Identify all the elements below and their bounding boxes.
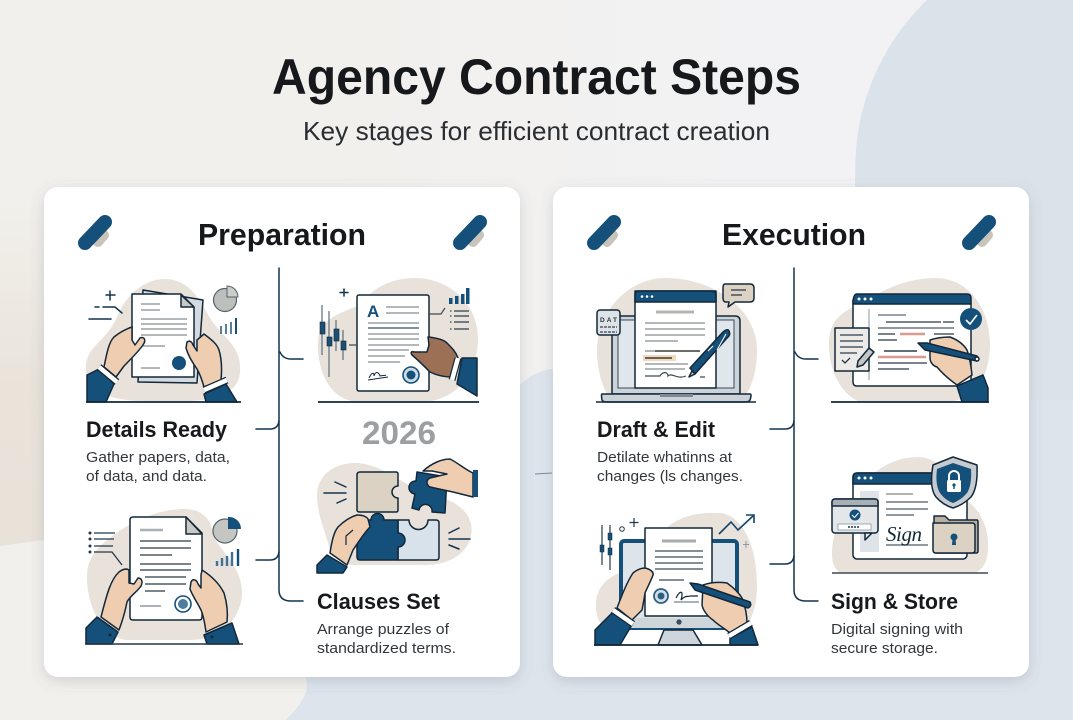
panel: execution [553,187,1029,677]
step: details ready: Gather papers, data, [86,449,230,466]
illustration: clauses puzzle [317,459,478,573]
illustration: sign and secure store: Sign [886,522,922,546]
panel: preparation [44,187,520,677]
icon: pill left [85,222,105,243]
illustration: contract review: A [367,302,379,321]
step: sign and store: secure storage. [831,640,938,657]
connector lines [770,268,818,601]
illustration: sign and secure store [832,457,988,573]
connector lines [256,268,303,601]
step: sign and store [831,589,963,657]
step: clauses set [317,589,456,657]
title: Agency Contract Steps [272,49,801,105]
illustration: hands holding paper [85,509,243,644]
year label: 2026 [362,415,436,451]
step: clauses set: Arrange puzzles of [317,621,450,638]
step: details ready [86,417,230,485]
illustration: redline review [829,278,990,402]
step: sign and store: Digital signing with [831,621,963,638]
subtitle: Key stages for efficient contract creation [303,116,770,146]
illustration: details ready [86,279,241,402]
step: details ready: of data, and data. [86,468,207,485]
heading: execution: Execution [722,217,866,252]
icon: pill left [594,222,614,243]
icon: pill right [969,222,989,243]
step: clauses set: Clauses Set [317,589,441,614]
step: draft and edit: Draft & Edit [597,417,716,442]
step: draft and edit [597,417,743,485]
heading: preparation: Preparation [198,217,366,252]
illustration: draft on laptop [596,278,757,402]
illustration: draft on laptop: DAT [600,317,617,324]
icon: pill right [460,222,480,243]
step: clauses set: standardized terms. [317,640,456,657]
step: draft and edit: changes (ls changes. [597,468,743,485]
step: sign and store: Sign & Store [831,589,958,614]
step: details ready: Details Ready [86,417,228,442]
illustration: contract review [318,278,479,402]
step: draft and edit: Detilate whatinns at [597,449,733,466]
illustration: monitor signing [594,513,758,645]
